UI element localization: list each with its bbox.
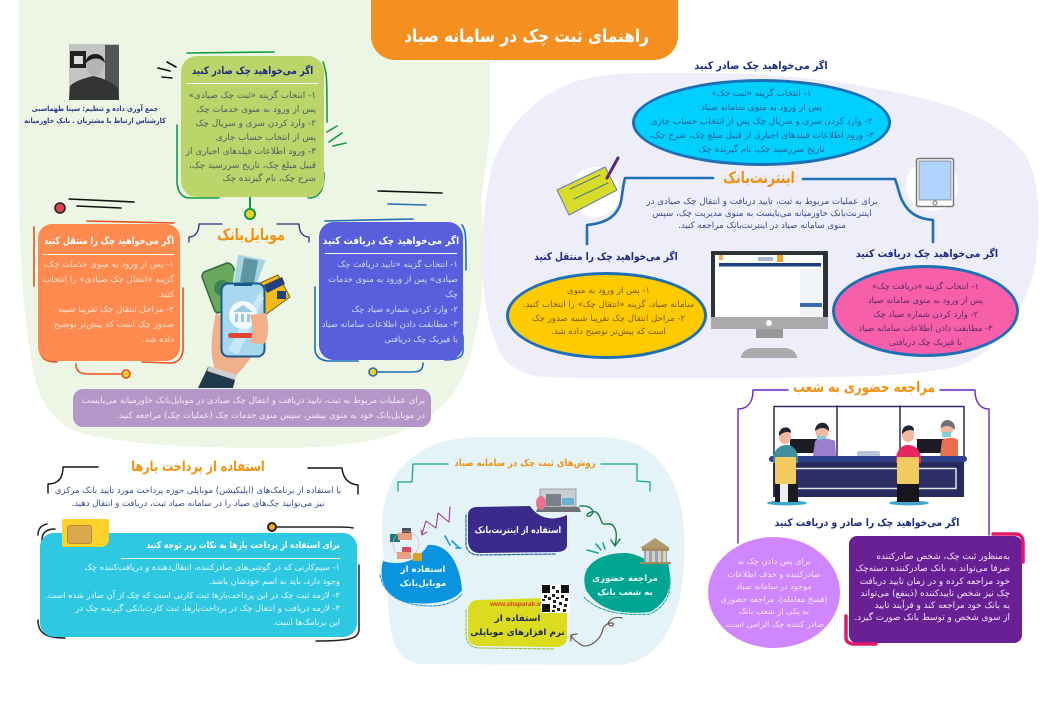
panel: internet bank issue ellipse: ۲- وارد کردن سری و سریال چک پس از انتخاب حساب جاری — [651, 117, 872, 127]
connector: issue box to mobile bank — [245, 186, 255, 219]
panel: mobile bank issue cheque: ۱- انتخاب گزینه «ثبت چک صیادی» — [188, 91, 316, 101]
title banner — [371, 0, 678, 60]
panel: internet bank transfer ellipse: ۱- پس از ورود به منوی — [567, 286, 650, 296]
panel: payment notes: وجود دارد، باید به اسم خودشان باشد. — [209, 576, 340, 586]
method shape: internet bank — [466, 506, 567, 555]
heading: internet bank issue: اگر می‌خواهید چک صادر کنید — [694, 60, 828, 72]
panel: payment notes: ۱- سیم‌کارتی که در گوشی‌های صادرکننده، انتقال‌دهنده و دریافت‌کننده چک — [84, 562, 340, 572]
panel: mobile bank note: در موبایل‌بانک خود به منوی بیشتر، سپس منوی خدمات چک (عملیات چک) مراجعه کنید. — [116, 410, 425, 420]
panel: branch lilac circle: (فسخ معامله)، مراجعه حضوری — [720, 594, 828, 604]
panel: payment notes — [40, 533, 357, 637]
panel: mobile bank transfer cheque: گزینه «انتقال چک صیادی» را انتخاب — [43, 275, 174, 285]
panel: mobile bank note — [73, 389, 431, 427]
text: method branch — [592, 574, 658, 598]
panel: mobile bank receive cheque: اگر می‌خواهید چک دریافت کنید — [323, 236, 459, 247]
text: method branch: مراجعه حضوری — [592, 574, 658, 584]
panel background: mobile bank green — [19, 0, 490, 448]
internet bank heading frame — [587, 178, 933, 244]
panel: mobile bank issue cheque: قبیل مبلغ چک، تاریخ سررسید چک، — [189, 161, 316, 171]
panel: internet bank transfer ellipse: است که پیش‌تر توضیح داده شد. — [551, 327, 666, 337]
text: payment intro: با استفاده از برنامک‌های (اپلیکیشن) موبایلی حوزه پرداخت مورد تایید بانک مرکزی — [55, 486, 341, 496]
panel: internet bank receive ellipse — [832, 265, 1019, 357]
methods heading bracket — [398, 464, 650, 491]
panel: mobile bank issue cheque — [181, 56, 324, 197]
panel: internet bank receive ellipse: ۱- انتخاب گزینه «دریافت چک» — [872, 281, 979, 291]
heading: methods: روش‌های ثبت چک در سامانه صیاد — [454, 458, 596, 469]
panel: branch purple box: صرفا می‌تواند به بانک صادرکننده دسته‌چک — [855, 564, 1010, 574]
icon: phones exchanging payment — [390, 528, 422, 561]
panel: mobile bank issue cheque: ۳- ورود اطلاعات فیلدهای اجباری از — [186, 147, 316, 157]
payment heading bracket — [48, 467, 358, 494]
panel: internet bank receive ellipse: با فیزیک چک دریافتی — [889, 337, 962, 347]
panel: internet bank receive ellipse: پس از ورود به منوی سامانه صیاد — [868, 295, 983, 305]
panel: branch lilac circle: به یکی از شعب بانک — [739, 606, 809, 616]
photo of author — [69, 44, 119, 100]
panel: branch lilac circle: صادرکننده و حذف اطلاعات — [728, 568, 820, 578]
text: internet bank intro: اینترنت‌بانک خاورمیانه می‌بایست به منوی مدیریت چک، سپس — [652, 209, 872, 219]
panel background: internet bank lavender — [482, 73, 1039, 378]
icon: computer with piggy bank — [536, 489, 581, 512]
panel: internet bank issue ellipse — [632, 79, 891, 166]
panel: payment notes: ۲- لازمه ثبت چک در این پرداخت‌یارها ثبت کارتی است که چک از آن صادر شده است. — [45, 590, 340, 600]
panel: payment notes: ۳- لازمه دریافت و انتقال چک در پرداخت‌یارها، ثبت کارت‌بانکی گیرنده چک در — [75, 603, 340, 613]
text: method mobile bank: استفاده از — [401, 565, 445, 575]
arrow: branch to software — [571, 617, 622, 646]
heading: branch visit: مراجعه حضوری به شعب — [793, 380, 935, 396]
text: method mobile bank — [400, 565, 446, 589]
panel: internet bank issue ellipse: ۳- ورود اطلاعات فیلدهای اجباری از قبیل مبلغ چک، شرح چک، — [649, 131, 874, 141]
icon: bank building — [640, 538, 671, 564]
text: payment intro — [55, 486, 341, 509]
panel: internet bank transfer ellipse — [506, 272, 707, 359]
text: method branch: به شعب بانک — [597, 588, 653, 598]
decorative strokes around transfer box — [34, 221, 183, 378]
panel: internet bank receive ellipse: ۳- مطابقت دادن اطلاعات سامانه صیاد — [858, 323, 993, 333]
branch heading frame — [738, 390, 989, 543]
text: method software: استفاده از — [495, 614, 540, 624]
panel: mobile bank issue cheque: ۲- وارد کردن سری و سریال چک — [196, 119, 316, 129]
heading: internet bank transfer: اگر می‌خواهید چک را منتقل کنید — [534, 251, 678, 263]
panel: internet bank issue ellipse: ۱- انتخاب گزینه «ثبت چک» — [712, 89, 811, 99]
panel: payment notes: برای استفاده از پرداخت یارها به نکات زیر توجه کنید — [147, 540, 340, 551]
text: method software: نرم افزارهای موبایلی — [470, 628, 565, 638]
panel: branch purple box — [849, 536, 1022, 643]
icon: hand holding phone — [198, 254, 290, 388]
text: payment intro: نیز می‌توانید چک‌های صیاد را در سامانه صیاد ثبت، دریافت و انتقال دهید. — [72, 499, 324, 509]
title banner: راهنمای ثبت چک در سامانه صیاد — [404, 26, 649, 47]
panel: mobile bank note: برای عملیات مربوط به ثبت، تایید دریافت و انتقال چک صیادی در موبایل‌بانک خاورمیانه می‌بایست — [82, 396, 425, 406]
method shape: mobile software — [466, 598, 567, 649]
panel: internet bank issue ellipse: تاریخ سررسید چک، نام گیرنده چک — [698, 145, 824, 155]
panel: branch purple box: به بانک خود مراجعه کند و فرآیند تایید — [875, 601, 1010, 611]
author caption: کارشناس ارتباط با مشتریان . بانک خاورمیانه — [24, 116, 166, 125]
panel: mobile bank issue cheque: پس از انتخاب حساب جاری — [216, 133, 316, 143]
icon: tablet — [906, 158, 958, 211]
text: shaparak url: www.shaparak.ir — [490, 601, 541, 608]
author caption — [24, 104, 166, 125]
icon: desktop monitor — [711, 251, 828, 358]
text: internet bank intro: برای عملیات مربوط به ثبت، تایید دریافت و انتقال چک صیادی در — [646, 197, 878, 207]
heading: mobile bank: موبایل‌بانک — [217, 225, 285, 244]
panel: branch purple box: چک نیز شخص تاییدکننده (ذینفع) می‌تواند — [860, 589, 1010, 599]
text: method mobile bank: موبایل‌بانک — [400, 579, 446, 589]
text: internet bank intro — [646, 197, 878, 231]
method shape: mobile bank — [380, 545, 462, 606]
heading: branch issue and receive: اگر می‌خواهید چک را صادر و دریافت کنید — [775, 517, 959, 529]
icon: QR code — [541, 584, 570, 613]
panel: mobile bank receive cheque: ۱- انتخاب گزینه «تایید دریافت چک — [338, 260, 458, 270]
panel: internet bank transfer ellipse: سامانه صیاد، گزینه «انتقال چک» را انتخاب کنید. — [523, 300, 694, 310]
mobile bank heading bracket — [189, 224, 309, 242]
heading: internet bank receive: اگر می‌خواهید چک دریافت کنید — [856, 248, 998, 260]
panel: mobile bank receive cheque: با فیزیک چک دریافتی — [384, 335, 458, 345]
panel: mobile bank transfer cheque: صدور چک است که پیش‌تر توضیح — [54, 320, 174, 330]
panel: mobile bank receive cheque — [319, 222, 463, 360]
panel: mobile bank transfer cheque: ۲- مراحل انتقال چک تقریبا شبیه — [58, 305, 174, 315]
panel: mobile bank transfer cheque: داده شد. — [142, 335, 174, 345]
panel: mobile bank receive cheque: ۳- مطابقت دادن اطلاعات سامانه صیاد — [322, 320, 458, 330]
panel: mobile bank issue cheque: پس از ورود به منوی خدمات چک — [196, 105, 316, 115]
text: internet bank intro: منوی سامانه صیاد در اینترنت‌بانک مراجعه کنید. — [678, 221, 846, 231]
text: method internet bank: استفاده از اینترنت‌بانک — [475, 526, 561, 536]
panel: mobile bank transfer cheque — [38, 224, 180, 361]
panel: internet bank receive ellipse: ۲- وارد کردن شماره صیاد چک — [873, 309, 978, 319]
panel: mobile bank transfer cheque: کنید. — [157, 290, 174, 300]
panel: branch purple box: از سوی شخص و توسط بانک صورت گیرد. — [854, 613, 1010, 623]
panel: branch purple box: خود مراجعه کرده و در زمان تایید دریافت — [860, 577, 1010, 587]
panel: mobile bank transfer cheque: ۱- پس از ورود به منوی خدمات چک، — [43, 260, 174, 270]
panel: mobile bank transfer cheque: اگر می‌خواهید چک را منتقل کنید — [44, 236, 174, 247]
panel: internet bank issue ellipse: پس از ورود به منوی سامانه صیاد — [701, 103, 822, 113]
method shape: branch — [584, 553, 670, 614]
panel: branch purple box: به‌منظور ثبت چک، شخص صادرکننده — [876, 552, 1010, 562]
icon: check with pen — [557, 158, 620, 217]
decorative strokes around issue box — [55, 52, 442, 213]
decorative strokes around receive box — [315, 219, 466, 376]
panel: branch lilac circle — [708, 537, 840, 648]
panel background: methods light blue — [382, 437, 685, 665]
arrow: zigzag to mobile bank — [421, 507, 450, 535]
panel: mobile bank issue cheque: شرح چک، نام گیرنده چک — [223, 174, 316, 184]
illustration: bank counter with customers — [767, 406, 967, 506]
text: method software — [470, 614, 565, 638]
icon: SIM card — [62, 519, 109, 547]
heading: payment apps: استفاده از پرداخت یارها — [131, 459, 265, 475]
panel: mobile bank receive cheque: چک — [445, 290, 458, 300]
panel: mobile bank issue cheque: اگر می‌خواهید چک صادر کنید — [192, 65, 313, 77]
arrow: internet bank to branch — [580, 506, 620, 546]
heading: internet bank: اینترنت‌بانک — [723, 168, 795, 187]
panel: branch lilac circle: برای پس دادن چک به — [737, 556, 811, 566]
panel: mobile bank receive cheque: صیادی» پس از ورود به منوی خدمات — [328, 275, 458, 285]
author caption: جمع آوری داده و تنظیم: سینا طهماسبی — [32, 104, 158, 113]
panel: branch lilac circle: موجود در سامانه صیاد — [736, 581, 812, 591]
decorative strokes around payment box — [38, 523, 359, 641]
panel: branch lilac circle: صادر کننده چک الزامی است. — [724, 618, 824, 628]
panel: internet bank transfer ellipse: ۲- مراحل انتقال چک تقریبا شبیه صدور چک — [532, 314, 685, 324]
panel: payment notes: این برنامک‌ها است. — [273, 617, 340, 627]
panel: mobile bank receive cheque: ۲- وارد کردن شماره صیاد چک — [352, 305, 458, 315]
accent dashes near blue and teal shapes — [445, 536, 605, 553]
